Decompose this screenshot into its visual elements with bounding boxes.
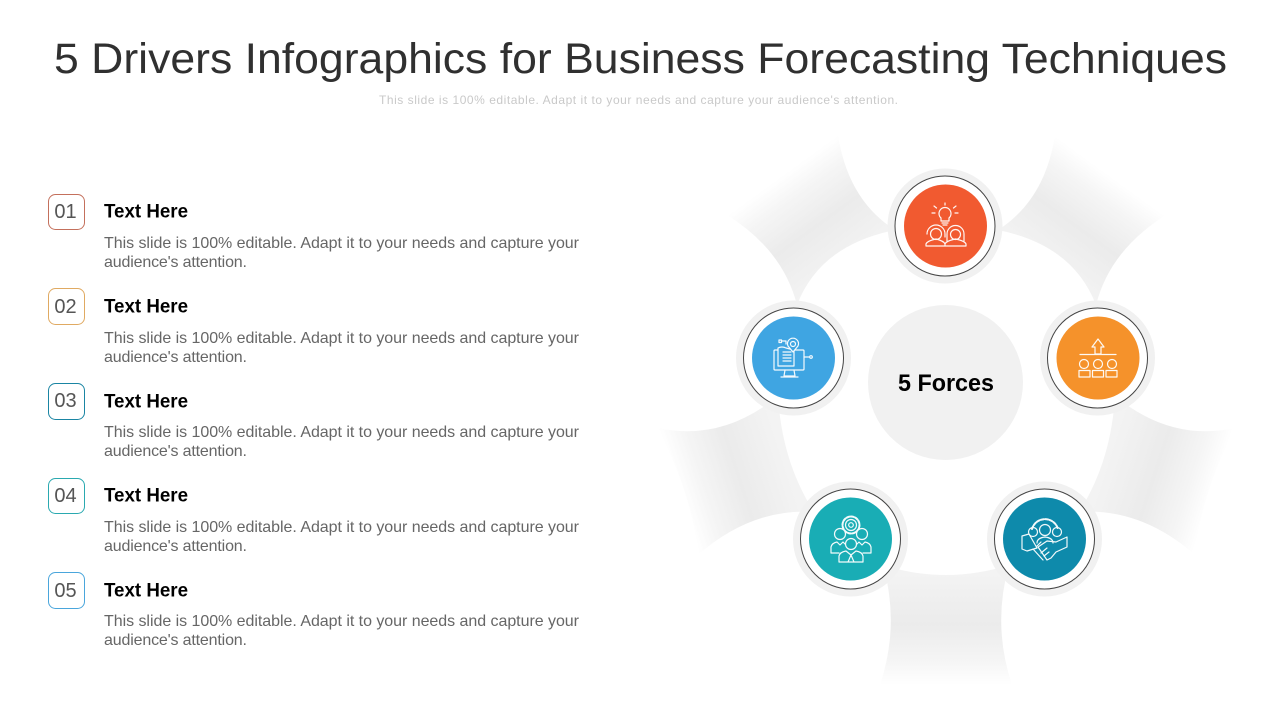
list item 04: Text Here	[104, 486, 188, 506]
title: 5 Drivers Infographics for Business Forecasting Techniques	[54, 35, 1227, 83]
list item 02: 02	[54, 296, 77, 318]
center label: 5 Forces	[898, 370, 994, 397]
list item 05: Text Here	[104, 580, 188, 602]
panel: numbered list	[48, 194, 580, 649]
node: left blue	[736, 300, 851, 416]
node: right orange	[1040, 300, 1155, 416]
list item 01: This slide is 100% editable. Adapt it to your needs and capture your	[104, 235, 580, 252]
icon: gear and three people	[831, 516, 871, 562]
list item 05	[48, 572, 580, 649]
icon: arrow over team	[1079, 339, 1117, 377]
list item 05: audience's attention.	[104, 632, 247, 649]
list item 04: audience's attention.	[104, 538, 247, 555]
list item 03: Text Here	[104, 392, 188, 412]
list item 04: 04	[54, 485, 77, 507]
node: top red	[888, 168, 1002, 284]
list item 05: 05	[54, 580, 77, 602]
subtitle: This slide is 100% editable. Adapt it to your needs and capture your audience's attention.	[379, 93, 898, 107]
background blades	[658, 135, 1235, 690]
center circle	[868, 305, 1023, 460]
node: bottom-left teal	[793, 482, 908, 596]
list item 02: audience's attention.	[104, 349, 247, 366]
list item 05: This slide is 100% editable. Adapt it to your needs and capture your	[104, 613, 580, 630]
list item 01: Text Here	[104, 202, 188, 222]
list item 02: This slide is 100% editable. Adapt it to your needs and capture your	[104, 330, 580, 347]
list item 03: 03	[54, 390, 77, 412]
list item 02	[48, 288, 580, 366]
list item 03	[48, 384, 580, 460]
list item 03: audience's attention.	[104, 443, 247, 460]
icon: handshake with gear and people	[1022, 519, 1067, 560]
panel: 5 forces diagram	[658, 135, 1235, 690]
list item 02: Text Here	[104, 296, 188, 318]
node: bottom-right dark teal	[987, 482, 1102, 596]
list item 01: 01	[54, 201, 77, 223]
list item 03: This slide is 100% editable. Adapt it to your needs and capture your	[104, 424, 580, 441]
list item 04	[48, 478, 580, 555]
icon: bulb and two people	[926, 203, 966, 246]
list item 01: audience's attention.	[104, 254, 247, 271]
icon: monitor with document and pin	[774, 338, 812, 377]
list item 04: This slide is 100% editable. Adapt it to your needs and capture your	[104, 519, 580, 536]
list item 01	[48, 194, 580, 271]
